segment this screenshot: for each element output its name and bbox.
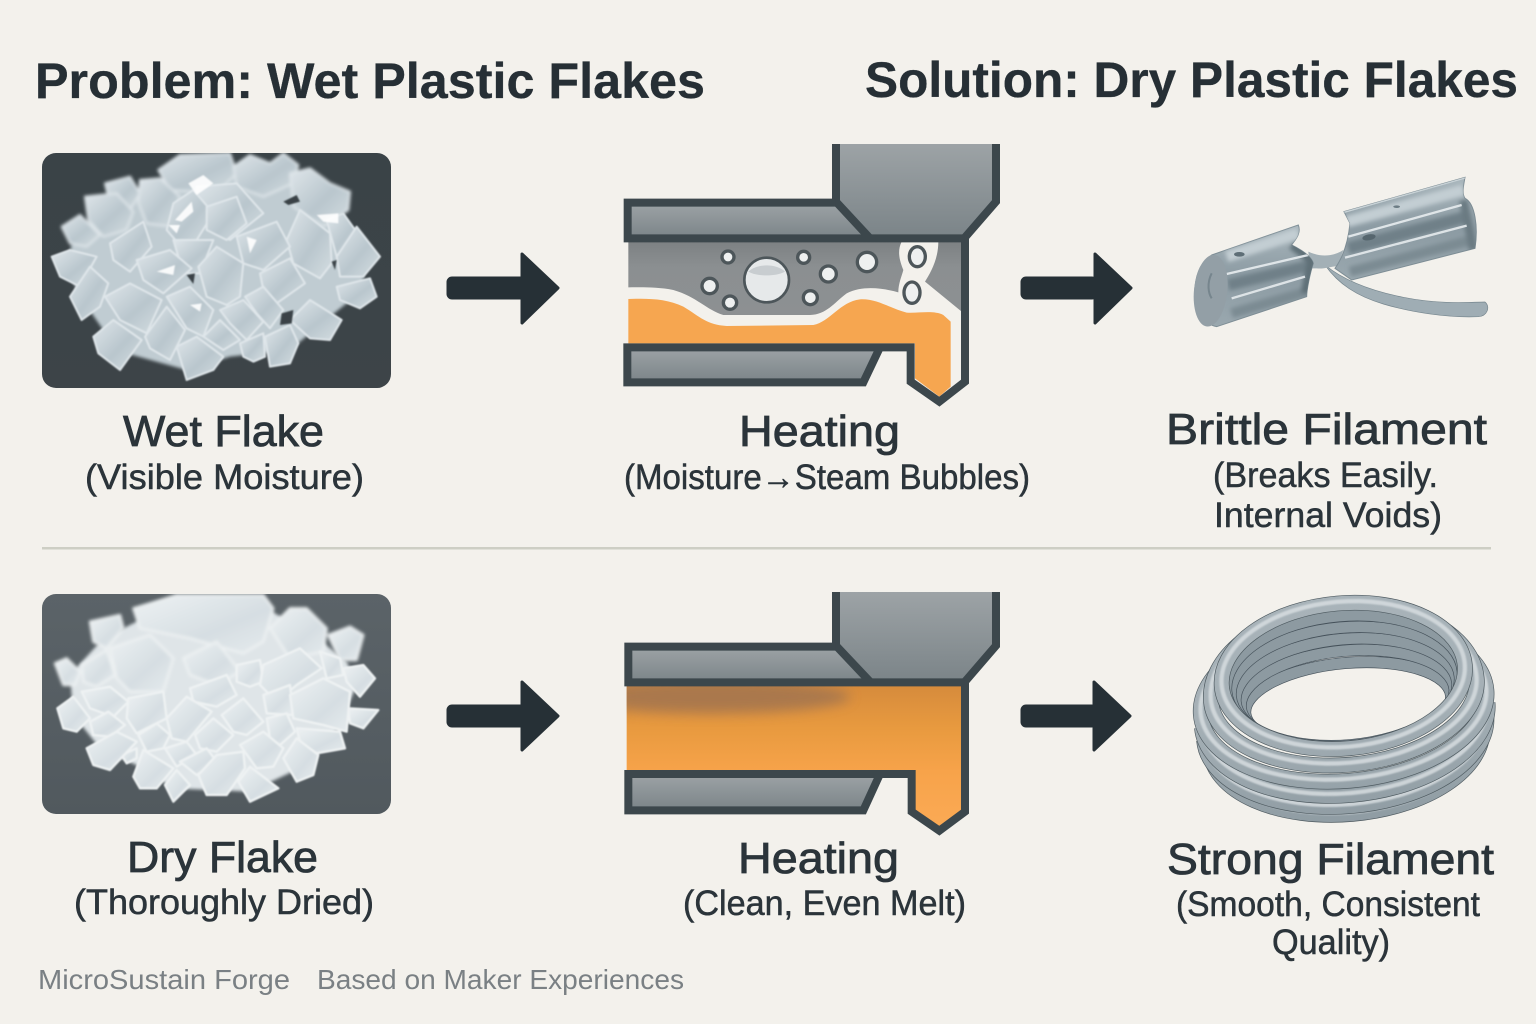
label: dry flake: Dry Flake [127, 833, 318, 882]
neck [1308, 250, 1343, 269]
labels: wet row [85, 405, 1487, 535]
molten plastic [628, 299, 951, 397]
cavity gray with steam [628, 242, 962, 315]
heading: problem: Problem: Wet Plastic Flakes [35, 53, 705, 109]
top coil turn [1215, 591, 1471, 759]
label: heating: Heating [739, 407, 900, 456]
barrel outlines [627, 144, 996, 402]
lower coil turns [1192, 593, 1496, 826]
sublabel: breaks easily: (Breaks Easily. [1213, 456, 1438, 495]
sublabel: internal voids: Internal Voids) [1214, 496, 1442, 535]
hopper [836, 592, 996, 682]
label: heating: Heating [738, 834, 899, 883]
label: strong filament: Strong Filament [1167, 835, 1494, 884]
label: wet flake: Wet Flake [123, 407, 324, 456]
lower barrel [628, 774, 879, 810]
brown tint in melt [626, 686, 852, 720]
arrow: heating to strong filament [1022, 682, 1130, 750]
arrow: heating to brittle filament [1022, 254, 1131, 323]
upper barrel [628, 203, 868, 238]
lower barrel [627, 347, 879, 382]
illustration: brittle filament [1190, 177, 1488, 328]
arrow: wet flake to heating [448, 254, 558, 323]
photo: wet flake pile [42, 153, 391, 388]
divider [42, 547, 1491, 550]
left fragment [1195, 225, 1313, 327]
upper barrel [628, 647, 867, 682]
footer: source note: Based on Maker Experiences [317, 964, 684, 995]
diagram: wet heating barrel [627, 144, 996, 402]
thin broken strand [1325, 265, 1488, 317]
steam bubbles [702, 247, 925, 309]
hopper [836, 144, 996, 237]
sublabel: smooth consistent: (Smooth, Consistent [1176, 885, 1480, 924]
sublabel: thoroughly dried: (Thoroughly Dried) [74, 883, 374, 922]
sublabel: moisture to steam bubbles: (Moisture→Steam Bubbles) [624, 458, 1030, 497]
barrel outlines [628, 592, 996, 831]
label: brittle filament: Brittle Filament [1166, 405, 1487, 454]
illustration: filament coil [1192, 590, 1496, 826]
sublabel: clean even melt: (Clean, Even Melt) [683, 884, 966, 923]
arrow: dry flake to heating [448, 682, 558, 750]
fracture end cap [1190, 253, 1231, 328]
sublabel: quality: Quality) [1272, 923, 1390, 962]
heading: solution: Solution: Dry Plastic Flakes [865, 52, 1518, 108]
inner back wall turns [1221, 606, 1468, 757]
labels: dry row [74, 833, 1494, 962]
diagram: dry heating barrel [570, 592, 996, 831]
right fragment [1335, 177, 1476, 280]
photo: dry flake pile [42, 594, 391, 814]
sublabel: visible moisture: (Visible Moisture) [85, 458, 364, 497]
footer: brand: MicroSustain Forge [38, 964, 290, 995]
molten plastic even melt [627, 686, 962, 828]
